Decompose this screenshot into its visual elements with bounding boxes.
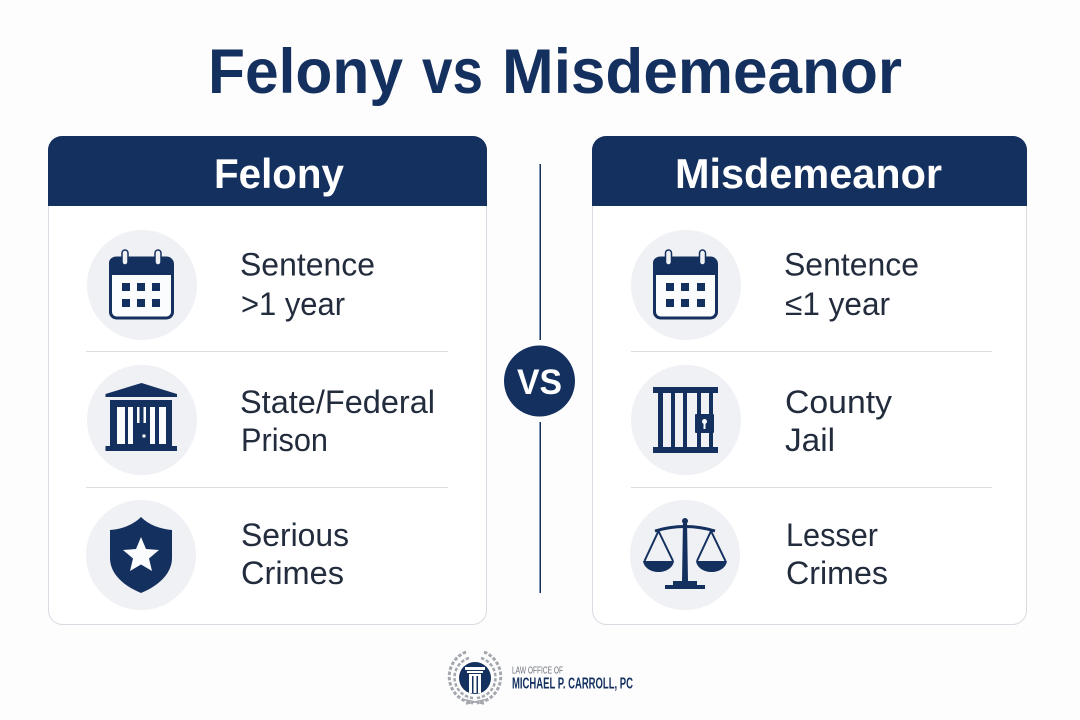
logo text (512, 664, 633, 692)
text: sentence up to one year (784, 246, 919, 322)
misdemeanor header: Misdemeanor (675, 150, 942, 197)
text: lesser crimes: Crimes (786, 555, 888, 591)
text: county jail: Jail (785, 422, 835, 458)
icon: prison building (87, 365, 197, 475)
text: serious crimes (241, 517, 349, 591)
logo emblem (449, 652, 501, 704)
icon: calendar (87, 230, 197, 340)
text: serious crimes: Serious (241, 517, 349, 553)
text: county jail: County (785, 384, 892, 420)
panel: felony (48, 136, 487, 624)
logo text: LAW OFFICE OF (512, 664, 563, 676)
text: sentence over one year (240, 246, 375, 322)
vs divider: VS (517, 363, 562, 402)
icon: shield with star (86, 500, 196, 610)
text: lesser crimes (786, 517, 888, 591)
icon: calendar (631, 230, 741, 340)
title: Felony (208, 37, 403, 107)
text: state or federal prison (240, 384, 435, 458)
misdemeanor header (592, 136, 1027, 206)
logo text: MICHAEL P. CARROLL, PC (512, 676, 633, 692)
text: state or federal prison: Prison (241, 422, 328, 458)
felony header (48, 136, 487, 206)
panel: misdemeanor (592, 136, 1027, 624)
text: sentence up to one year: ≤1 year (785, 286, 890, 322)
text: state or federal prison: State/Federal (240, 384, 435, 420)
title: vs (422, 37, 483, 107)
text: sentence over one year: Sentence (240, 246, 375, 282)
icon: jail bars (631, 365, 741, 475)
icon: scales of justice (630, 500, 740, 610)
text: sentence over one year: >1 year (241, 286, 345, 322)
vs divider (504, 164, 575, 593)
text: sentence up to one year: Sentence (784, 246, 919, 282)
text: county jail (785, 384, 892, 458)
logo: law office (449, 652, 633, 704)
text: lesser crimes: Lesser (786, 517, 878, 553)
title: Misdemeanor (502, 37, 902, 107)
felony header: Felony (214, 150, 345, 197)
text: serious crimes: Crimes (241, 555, 344, 591)
